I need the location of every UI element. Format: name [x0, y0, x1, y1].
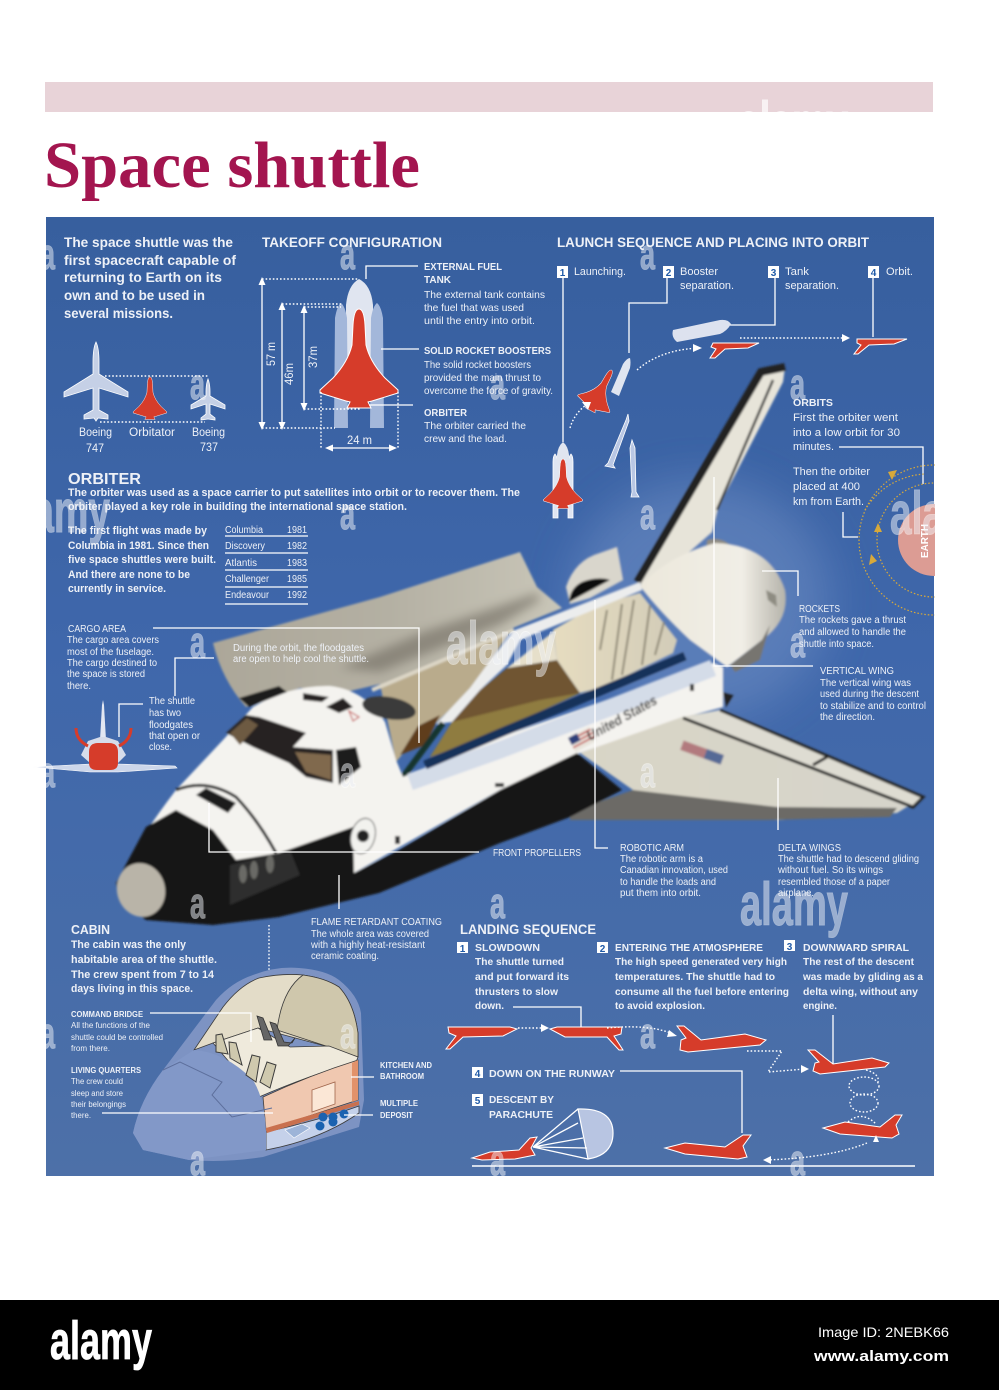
step numbers and labels: 1: [560, 268, 566, 279]
label: front propellers: FRONT PROPELLERS: [493, 848, 581, 859]
step 2 entering the atmosphere: to avoid explosion.: [615, 1000, 705, 1012]
cabin paragraph: [71, 939, 217, 995]
label: robotic arm: ROBOTIC ARM: [620, 843, 684, 854]
steps 4 and 5: DOWN ON THE RUNWAY: [489, 1068, 615, 1080]
watermarks: a: [790, 618, 805, 667]
step 2 entering the atmosphere: [597, 942, 789, 1012]
icon: orbiter: [133, 377, 167, 419]
cabin labels: sleep and store: [71, 1089, 124, 1098]
watermarks: a: [40, 1009, 55, 1058]
steps 4 and 5: 5: [475, 1096, 481, 1107]
step 1 slowdown: [457, 942, 569, 1012]
watermarks: [46, 245, 935, 1176]
website: www.alamy.com: [813, 1348, 949, 1365]
step 3 downward spiral: The rest of the descent: [803, 956, 914, 968]
step 1 slowdown: SLOWDOWN: [475, 942, 540, 954]
orbits text: First the orbiter went: [793, 412, 898, 424]
label: robotic arm: put them into orbit.: [620, 888, 701, 899]
label: vertical wing: VERTICAL WING: [820, 666, 894, 677]
panel: intro text: own and to be used in: [64, 287, 205, 303]
cabin paragraph: The cabin was the only: [71, 939, 187, 951]
watermarks: a: [790, 1136, 805, 1185]
step 3 downward spiral: DOWNWARD SPIRAL: [803, 942, 910, 954]
launching stack: [544, 442, 582, 518]
dimension lines: 24 m: [347, 435, 372, 447]
table of shuttles: Discovery: [225, 541, 265, 552]
table of shuttles: Atlantis: [225, 558, 257, 569]
label: rockets: ROCKETS: [799, 604, 840, 615]
cabin labels: shuttle could be controlled: [71, 1033, 163, 1042]
steps 4 and 5: DESCENT BY: [489, 1094, 554, 1106]
label: delta wings: The shuttle had to descend gliding: [778, 854, 919, 865]
cabin labels: MULTIPLE: [380, 1099, 419, 1108]
heading: LANDING SEQUENCE: [460, 921, 596, 937]
step numbers and labels: 2: [666, 268, 672, 279]
label: robotic arm: to handle the loads and: [620, 877, 716, 888]
callouts on the shuttle: [33, 477, 926, 962]
label: vertical wing: to stabilize and to control: [820, 701, 926, 712]
watermarks: a: [490, 360, 505, 409]
watermarks: a: [640, 490, 655, 539]
orbiter paragraph: orbiter played a key role in building the international space station.: [68, 501, 407, 513]
step 3 downward spiral: [784, 940, 923, 1012]
separated shuttle and boosters: [574, 358, 639, 497]
cabin labels: The crew could: [71, 1077, 123, 1086]
label: vertical wing: used during the descent: [820, 689, 919, 700]
takeoff labels: The orbiter carried the: [424, 420, 526, 432]
step 3 downward spiral: 3: [787, 942, 793, 953]
heading: TAKEOFF CONFIGURATION: [262, 234, 442, 250]
photo: space shuttle: [111, 367, 923, 925]
solid rocket boosters: [334, 303, 384, 428]
label: robotic arm: The robotic arm is a: [620, 854, 703, 865]
heading: LAUNCH SEQUENCE AND PLACING INTO ORBIT: [557, 234, 869, 250]
icon: Boeing 747: [64, 342, 128, 421]
takeoff labels: until the entry into orbit.: [424, 315, 535, 327]
table of shuttles: [225, 525, 308, 604]
step 3 downward spiral: delta wing, without any: [803, 986, 918, 998]
heading: CABIN: [71, 922, 110, 937]
step 2 entering the atmosphere: temperatures. The shuttle had to: [615, 971, 775, 983]
icon: shuttle front view with floodgates: [33, 700, 177, 772]
size comparison icons: [64, 342, 225, 455]
panel: intro text: returning to Earth on its: [64, 269, 222, 285]
takeoff labels: [424, 261, 553, 445]
watermarks: a: [640, 748, 655, 797]
takeoff labels: The external tank contains: [424, 289, 545, 301]
label: delta wings: [777, 843, 919, 899]
steps 4 and 5: PARACHUTE: [489, 1109, 553, 1121]
header band: [45, 82, 933, 112]
step 1 slowdown: 1: [460, 944, 466, 955]
image id: Image ID: 2NEBK66: [818, 1324, 949, 1340]
cargo area text: most of the fuselage.: [67, 647, 154, 658]
watermarks: a: [190, 879, 205, 928]
step 2 entering the atmosphere: 2: [600, 944, 606, 955]
cabin labels: LIVING QUARTERS: [71, 1066, 142, 1075]
aircraft labels: 737: [200, 442, 218, 454]
watermarks: a: [190, 618, 205, 667]
cabin paragraph: habitable area of the shuttle.: [71, 954, 217, 966]
cargo area text: that open or: [149, 731, 201, 742]
step 1 slowdown: and put forward its: [475, 971, 569, 983]
alamy logo: alamy: [50, 1311, 152, 1371]
watermarks: a: [190, 360, 205, 409]
watermarks: a: [340, 230, 355, 279]
step 3 downward spiral: was made by gliding as a: [802, 971, 923, 983]
earth diagram: EARTH: [920, 524, 931, 558]
takeoff labels: crew and the load.: [424, 433, 507, 445]
aircraft labels: [79, 427, 225, 455]
watermarks: a: [40, 748, 55, 797]
red orbiter side views: [710, 343, 759, 358]
orbits text: minutes.: [793, 441, 834, 453]
orbiter paragraph: Columbia in 1981. Since then: [68, 540, 209, 552]
separated tank: [672, 320, 731, 342]
panel: takeoff configuration: [258, 234, 553, 452]
cargo area text: close.: [149, 742, 172, 753]
cabin labels: [71, 1010, 432, 1120]
step 3 downward spiral: engine.: [803, 1000, 837, 1012]
runway: [472, 1165, 915, 1167]
watermarks: a: [640, 230, 655, 279]
panel: intro text: first spacecraft capable of: [64, 252, 236, 268]
cargo area text: are open to help cool the shuttle.: [233, 654, 369, 665]
cabin paragraph: The crew spent from 7 to 14: [71, 969, 215, 981]
table of shuttles: 1992: [287, 590, 307, 601]
cargo area text: the space is stored: [67, 669, 145, 680]
takeoff labels: EXTERNAL FUEL: [424, 261, 503, 273]
watermarks: a: [340, 490, 355, 539]
label: robotic arm: [620, 843, 728, 899]
cargo area text: [67, 624, 369, 753]
cargo area text: The cargo area covers: [67, 635, 159, 646]
watermarks: a: [490, 1136, 505, 1185]
label: robotic arm: Canadian innovation, used: [620, 865, 728, 876]
earth diagram: [858, 464, 935, 616]
panel: orbits: [793, 399, 935, 616]
step numbers and labels: Tank: [785, 266, 810, 278]
step numbers and labels: Orbit.: [886, 266, 913, 278]
cabin labels: COMMAND BRIDGE: [71, 1010, 144, 1019]
label: delta wings: DELTA WINGS: [778, 843, 841, 854]
aircraft labels: Orbitator: [129, 427, 175, 439]
table of shuttles: Columbia: [225, 525, 263, 536]
table of shuttles: 1982: [287, 541, 307, 552]
label: rockets: and allowed to handle the: [799, 627, 906, 638]
cargo area text: CARGO AREA: [68, 624, 126, 635]
label: flame retardant coating: with a highly heat-resistant: [310, 940, 425, 951]
table of shuttles: Endeavour: [225, 590, 270, 601]
label: flame retardant coating: FLAME RETARDANT COATING: [311, 917, 442, 928]
steps 4 and 5: 4: [475, 1069, 481, 1080]
step numbers and labels: separation.: [680, 280, 734, 292]
cargo area text: The shuttle: [149, 696, 195, 707]
label: delta wings: without fuel. So its wings: [777, 865, 883, 876]
blue panel background: [46, 217, 934, 1176]
panel: intro text: several missions.: [64, 305, 173, 321]
cargo area text: floodgates: [149, 720, 193, 731]
label: delta wings: airplane.: [778, 888, 814, 899]
watermarks: alamy: [740, 871, 848, 938]
watermarks: a: [40, 230, 55, 279]
step 2 entering the atmosphere: ENTERING THE ATMOSPHERE: [615, 942, 763, 954]
panel: landing sequence: [446, 921, 923, 1166]
aircraft labels: Boeing: [192, 427, 225, 439]
takeoff labels: the fuel that was used: [424, 302, 524, 314]
panel: intro text: The space shuttle was the: [64, 234, 233, 250]
panel: intro text: [64, 234, 236, 321]
watermarks: alamy: [446, 610, 556, 677]
step 1 slowdown: thrusters to slow: [475, 986, 559, 998]
cabin labels: DEPOSIT: [380, 1111, 413, 1120]
step 1 slowdown: The shuttle turned: [475, 956, 564, 968]
orbiter paragraph: [68, 487, 520, 595]
label: flame retardant coating: The whole area was covered: [311, 929, 429, 940]
label: vertical wing: [820, 666, 926, 723]
takeoff labels: TANK: [424, 274, 451, 286]
step numbers and labels: Launching.: [574, 266, 626, 278]
cabin paragraph: days living in this space.: [71, 983, 193, 995]
table of shuttles: 1983: [287, 558, 307, 569]
label: rockets: The rockets gave a thrust: [799, 615, 906, 626]
parachute: [533, 1109, 613, 1159]
heading: ORBITER: [68, 471, 141, 488]
orbiter paragraph: five space shuttles were built.: [68, 554, 216, 566]
orbiter paragraph: currently in service.: [68, 583, 166, 595]
takeoff labels: SOLID ROCKET BOOSTERS: [424, 345, 551, 357]
orbiter silhouette: [320, 309, 398, 408]
orbits text: placed at 400: [793, 481, 860, 493]
step numbers and labels: separation.: [785, 280, 839, 292]
icon: Boeing 737: [191, 379, 225, 420]
label: flame retardant coating: [310, 917, 442, 962]
dimension lines: [258, 277, 398, 452]
cabin labels: KITCHEN AND: [380, 1061, 432, 1070]
orbits text: Then the orbiter: [793, 466, 870, 478]
cargo area text: there.: [67, 681, 91, 692]
cargo area text: has two: [149, 708, 181, 719]
aircraft labels: Boeing: [79, 427, 112, 439]
watermarks: a: [340, 1009, 355, 1058]
step 1 slowdown: down.: [475, 1000, 504, 1012]
step numbers and labels: Booster: [680, 266, 718, 278]
cargo area text: The cargo destined to: [67, 658, 157, 669]
orbits text: into a low orbit for 30: [793, 427, 900, 439]
cabin labels: BATHROOM: [380, 1072, 424, 1081]
step numbers and labels: 3: [771, 268, 777, 279]
external tank: [346, 279, 373, 370]
aircraft labels: 747: [86, 443, 104, 455]
cabin labels: their belongings: [71, 1100, 126, 1109]
cabin labels: All the functions of the: [71, 1021, 151, 1030]
dotted flight path: [518, 1024, 879, 1164]
steps 4 and 5: [472, 1067, 615, 1121]
step 2 entering the atmosphere: consume all the fuel before entering: [615, 986, 789, 998]
panel: launch sequence: [544, 234, 913, 518]
takeoff labels: provided the main thrust to: [424, 372, 541, 384]
footer bar: [0, 1300, 999, 1390]
watermarks: a: [790, 360, 805, 409]
takeoff labels: ORBITER: [424, 407, 467, 419]
step 2 entering the atmosphere: The high speed generated very high: [615, 956, 787, 968]
dimension lines: 46m: [284, 363, 296, 385]
table of shuttles: 1981: [287, 525, 307, 536]
dimension lines: 57 m: [266, 342, 278, 366]
takeoff labels: overcome the force of gravity.: [424, 385, 553, 397]
watermarks: a: [490, 879, 505, 928]
cabin labels: there.: [71, 1111, 91, 1120]
label: vertical wing: The vertical wing was: [820, 678, 911, 689]
dimension lines: 37m: [308, 346, 320, 368]
watermarks: a: [190, 1136, 205, 1185]
watermarks: a: [340, 748, 355, 797]
label: vertical wing: the direction.: [820, 712, 875, 723]
step numbers and labels: 4: [871, 268, 877, 279]
label: delta wings: resembled those of a paper: [778, 877, 891, 888]
watermarks: alamy: [0, 478, 110, 545]
watermark on header band: alamy: [738, 90, 848, 157]
table of shuttles: Challenger: [225, 574, 270, 585]
orbits text: [793, 397, 900, 508]
takeoff labels: The solid rocket boosters: [424, 359, 531, 371]
panel: orbiter: [68, 471, 520, 604]
orbiter paragraph: The orbiter was used as a space carrier to put satellites into orbit or to recover them. The: [68, 487, 520, 499]
table of shuttles: 1985: [287, 574, 307, 585]
label: rockets: shuttle into space.: [799, 639, 874, 650]
title: Space shuttle: [44, 129, 420, 202]
cabin cutaway illustration: [102, 968, 374, 1161]
orbits text: km from Earth.: [793, 496, 864, 508]
orbiter paragraph: The first flight was made by: [68, 525, 208, 537]
panel: cabin: [71, 922, 432, 1161]
cabin labels: from there.: [71, 1044, 110, 1053]
step numbers and labels: [557, 266, 913, 292]
orbits text: ORBITS: [793, 397, 833, 409]
orbiter paragraph: And there are none to be: [68, 569, 190, 581]
watermarks: a: [640, 1009, 655, 1058]
label: rockets: [799, 604, 906, 650]
red landing orbiters: [446, 1026, 902, 1160]
cargo area text: During the orbit, the floodgates: [233, 643, 364, 654]
label: flame retardant coating: ceramic coating.: [311, 951, 379, 962]
photo: space shuttle: United States: [584, 692, 660, 744]
